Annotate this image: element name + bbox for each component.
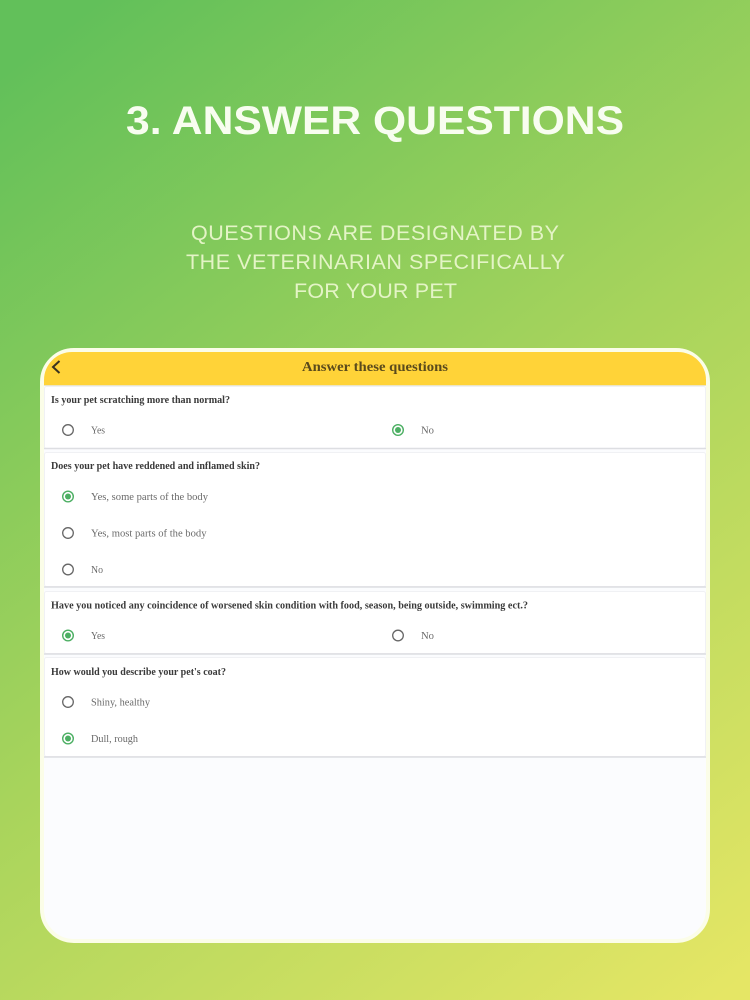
question card 1: No xyxy=(421,426,434,436)
question card 4: Shiny, healthy xyxy=(91,698,150,708)
question card 4: How would you describe your pet's coat? xyxy=(51,667,226,678)
question card 3 xyxy=(44,592,706,654)
subtitle xyxy=(186,221,565,303)
title: 3. ANSWER QUESTIONS xyxy=(126,99,624,143)
subtitle: THE VETERINARIAN SPECIFICALLY xyxy=(186,250,565,274)
question card 2 xyxy=(44,452,706,587)
question card 4: Dull, rough xyxy=(91,734,138,745)
icon: back arrow xyxy=(53,361,60,373)
question card 1 xyxy=(44,386,706,448)
question card 3: No xyxy=(421,631,434,642)
app header bar xyxy=(44,352,706,386)
question card 3: Yes xyxy=(91,631,105,642)
panel: app screen xyxy=(42,350,708,941)
question card 1: Yes xyxy=(91,426,105,436)
subtitle: FOR YOUR PET xyxy=(294,279,457,303)
subtitle: QUESTIONS ARE DESIGNATED BY xyxy=(191,221,559,245)
question card 2: No xyxy=(91,565,103,576)
question card 2: Yes, some parts of the body xyxy=(91,492,208,503)
question card 4 xyxy=(44,658,706,757)
header title: Answer these questions xyxy=(302,359,448,374)
question card 2: Yes, most parts of the body xyxy=(91,528,206,540)
question card 3: Have you noticed any coincidence of worsened skin condition with food, season, being outside, swimming ect.? xyxy=(51,600,528,612)
question card 1: Is your pet scratching more than normal? xyxy=(51,395,230,406)
question card 2: Does your pet have reddened and inflamed skin? xyxy=(51,461,260,472)
